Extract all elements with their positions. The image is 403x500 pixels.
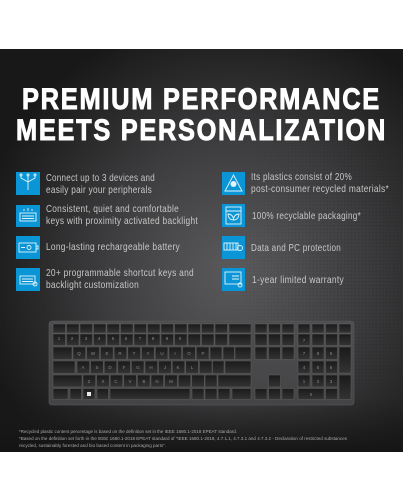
keyboard body [49,321,354,405]
footnotes: *Recycled plastic content percentage is based on the definition set in the IEEE 1680.1-2018 EPEAT standard. [19,429,237,434]
key legends: L [191,365,194,370]
key legends: 9 [166,336,169,341]
key legends: H [149,365,153,370]
footnotes [19,429,348,448]
text: backlit keys: keys with proximity activated backlight [46,216,198,227]
text: backlit keys [46,204,198,227]
title [16,83,387,147]
icon: programmable keys [16,268,40,291]
text: recycled plastics [251,172,389,195]
text: shortcut keys: 20+ programmable shortcut keys and [46,268,194,279]
key legends: T [133,351,136,356]
text: backlit keys: Consistent, quiet and comfortable [46,204,179,215]
key legends: 7 [139,336,142,341]
text: connect devices: easily pair your peripherals [46,185,152,196]
key legends: 0 [179,336,182,341]
key legends: 6 [125,336,128,341]
text: shortcut keys [46,268,194,291]
feature: shortcut keys [16,268,194,291]
feature: connect devices [16,172,155,196]
text: data protection: Data and PC protection [251,243,341,254]
key legends: 1 [58,336,61,341]
feature: data protection [222,236,341,259]
key legends: 0 [310,392,313,397]
key legends: W [91,351,96,356]
footnotes: *Based on the definition set forth in the IEEE 1680.1-2018 EPEAT standard of "IEEE 1680.1-2018, 4.7.1.1, 4.7.3.1 and 4.7.3.2 - Declaration of restricted substances [19,436,348,441]
key legends: 8 [317,351,320,356]
feature: battery [16,236,180,259]
key legends: 3 [85,336,88,341]
key legends: U [160,351,164,356]
key legends: O [187,351,191,356]
key legends: 7 [303,338,306,343]
icon: battery [16,236,40,259]
key legends: Q [77,351,81,356]
key legends: V [128,379,132,384]
key legends: G [136,365,140,370]
key legends: Y [146,351,150,356]
key legends: X [101,379,105,384]
key legends: 5 [112,336,115,341]
key legends: A [81,365,85,370]
key legends: C [114,379,118,384]
key legends: Z [88,379,91,384]
key legends: D [108,365,112,370]
key legends: 9 [330,351,333,356]
text: recycled plastics: Its plastics consist of 20% [251,172,352,183]
text: recyclable packaging: 100% recyclable packaging* [252,211,361,222]
key legends: M [169,379,173,384]
key legends: I [174,351,176,356]
icon: keyboard with lock [222,236,245,259]
text: connect devices: Connect up to 3 devices and [46,173,155,184]
keyboard [49,321,354,405]
key legends: E [105,351,109,356]
key legends: N [155,379,159,384]
key legends: 5 [317,365,320,370]
key legends: 2 [71,336,74,341]
key legends: 4 [98,336,101,341]
key legends: 1 [303,379,306,384]
text: connect devices [46,173,155,196]
feature: recyclable packaging [222,204,361,227]
feature: recycled plastics [222,172,389,195]
text: battery: Long-lasting rechargeable battery [46,242,180,253]
footnotes: recycled, sustainably forested and bio based content in packaging parts". [19,443,166,448]
key legends: 2 [317,379,320,384]
key legends: P [201,351,205,356]
key legends: 3 [330,379,333,384]
icon: packaging box with leaf [222,204,245,227]
key legends: 6 [330,365,333,370]
key legends [58,336,333,397]
key legends: 4 [303,365,306,370]
icon: warranty card [222,268,245,291]
feature: warranty [222,268,344,291]
key legends: B [142,379,146,384]
key legends: F [123,365,126,370]
key legends: R [118,351,122,356]
icon: keyboard backlight [16,205,40,227]
windows key glyph [87,392,91,396]
keys [53,324,351,400]
icon: branching connection [16,172,40,195]
text: warranty: 1-year limited warranty [252,275,344,286]
key legends: J [164,365,166,370]
icon: recycling triangle [222,172,245,195]
key legends: 8 [152,336,155,341]
feature: backlit keys [16,204,198,227]
text: shortcut keys: backlight customization [46,280,139,291]
key legends: K [176,365,180,370]
key legends: 7 [303,351,306,356]
key legends: S [95,365,99,370]
